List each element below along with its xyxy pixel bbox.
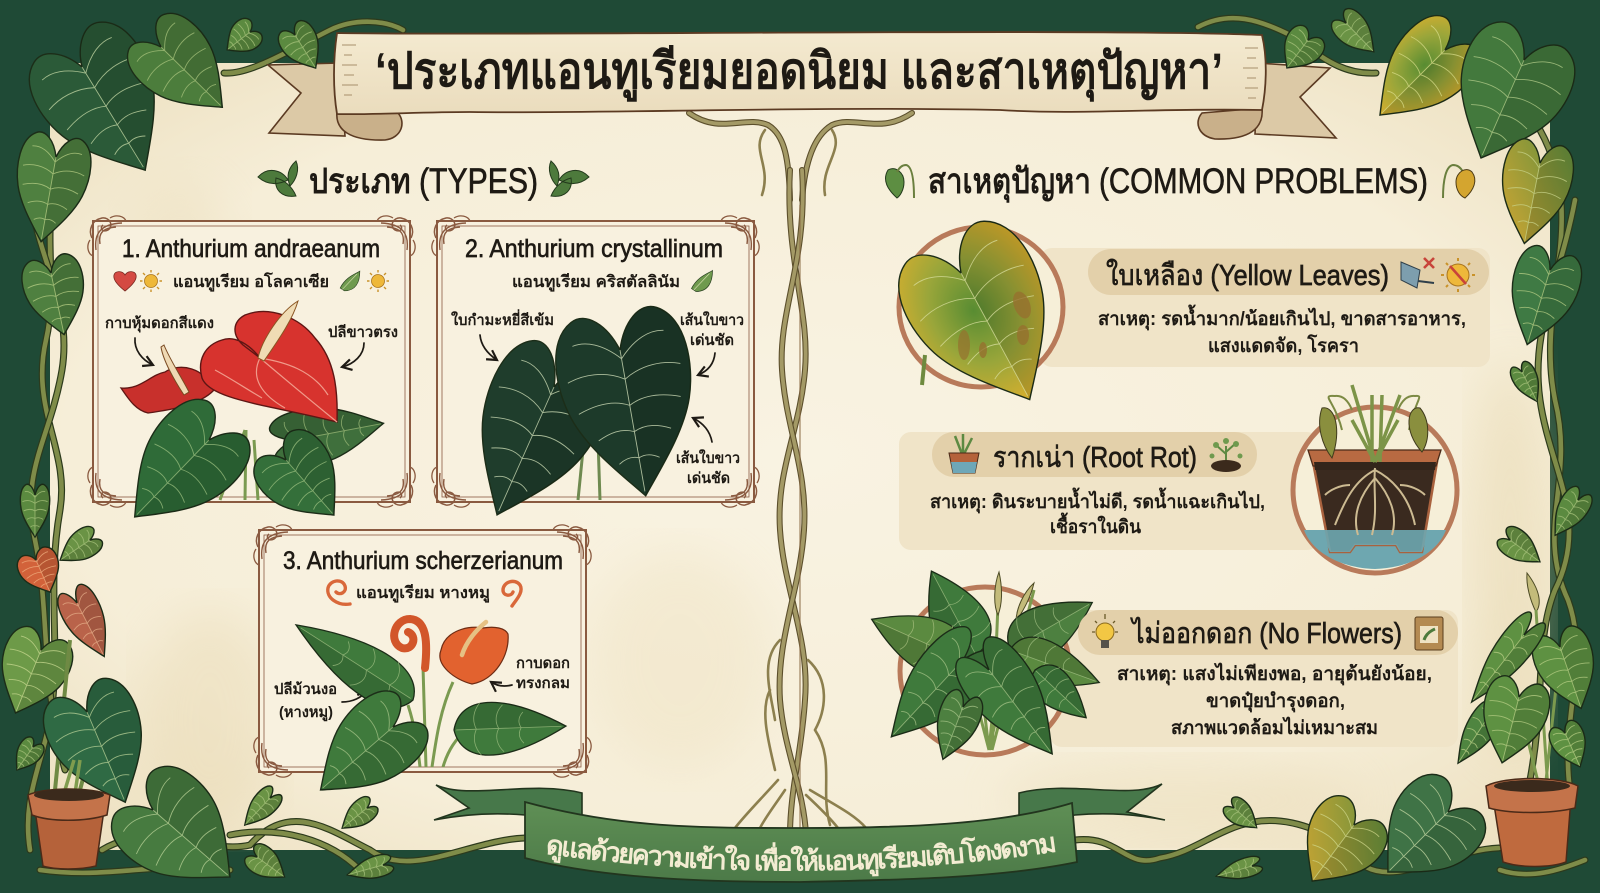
card 3 title: 3. Anthurium scherzerianum: [283, 547, 563, 575]
icon: waterlogged pot: [949, 434, 979, 473]
card 1 title: 1. Anthurium andraeanum: [122, 235, 380, 263]
icon: fertilizer bag: [1415, 617, 1443, 650]
label: prominent upper: เด่นชัด: [690, 332, 734, 349]
icon: seedling in dish: [1210, 438, 1242, 472]
banner left roll: [337, 112, 402, 140]
heading pill 2: [932, 432, 1257, 477]
label: curled spadix: ปลีม้วนงอ: [274, 681, 337, 698]
arrow: velvet leaf: [480, 335, 497, 360]
bottom vines: [40, 821, 1585, 874]
info strip 1: [1040, 248, 1490, 367]
card frame 2: [432, 216, 759, 507]
card 3 spiral icons: [328, 581, 521, 606]
arrow: round spathe: [491, 682, 512, 686]
icon: leaf sprig right: [549, 161, 589, 196]
description 2 line 1: สาเหตุ: ดินระบายน้ำไม่ดี, รดน้ำแฉะเกินไป,: [930, 487, 1265, 514]
illustration: orange anthurium: [283, 604, 567, 820]
arrow: spadix: [342, 343, 364, 367]
panel: yellow leaves: [883, 208, 1490, 432]
panel: type 3 Anthurium scherzerianum: [254, 525, 591, 820]
banner left tail: [268, 63, 345, 136]
corner foliage top-left: [5, 4, 331, 341]
ribbon right tail: [1019, 784, 1165, 825]
icon: yellow drooping leaf right: [1443, 165, 1475, 198]
heading pill 1: [1088, 249, 1489, 295]
terracotta pot right: [1493, 798, 1571, 866]
label: prominent lower: เด่นชัด: [687, 470, 730, 487]
title banner: [268, 32, 1336, 140]
heading text: types: ประเภท (TYPES): [309, 162, 538, 201]
panel: root rot: [899, 385, 1457, 573]
ribbon body: [525, 802, 1077, 882]
label: spathe shape: กาบดอก: [516, 655, 570, 672]
banner right roll: [1198, 108, 1262, 139]
card 2 subtitle: แอนทูเรียม คริสตัลลินัม: [512, 272, 680, 293]
panel: type 1 Anthurium andraeanum: [88, 216, 415, 550]
arrow: upper veins: [698, 353, 715, 375]
icon: drooping leaf left: [886, 165, 914, 198]
illustration: red anthurium: [101, 301, 389, 550]
panel: type 2 Anthurium crystallinum: [432, 216, 759, 539]
illustration: pot with rotten roots: [1304, 385, 1446, 569]
heading text: problems: สาเหตุปัญหา (COMMON PROBLEMS): [928, 162, 1428, 203]
description 3 line 2: ขาดปุ๋ยบำรุงดอก,: [1206, 691, 1345, 713]
label: white veins upper: เส้นใบขาว: [680, 311, 744, 329]
description 1 line 2: แสงแดดจัด, โรครา: [1208, 334, 1359, 357]
left border vines: [28, 130, 78, 850]
info strip 2: [899, 432, 1319, 550]
icon: sun crossed: [1441, 258, 1475, 292]
frame ring 3: [900, 587, 1070, 755]
main title: ‘ประเภทแอนทูเรียมยอดนิยม และสาเหตุปัญหา’: [375, 43, 1223, 102]
heading: root rot: รากเน่า (Root Rot): [993, 442, 1197, 474]
footer ribbon: [434, 783, 1166, 883]
icon: leaf sprig left: [258, 161, 298, 196]
card 3 subtitle: แอนทูเรียม หางหมู: [356, 583, 490, 604]
description 2 line 2: เชื้อราในดิน: [1050, 512, 1141, 538]
section heading: types: [258, 161, 589, 201]
illustration: plant without flowers: [861, 558, 1107, 774]
illustration: yellowing leaf: [883, 208, 1090, 432]
card 1 icons: [114, 270, 389, 292]
icon: light bulb: [1092, 614, 1118, 648]
label: pig tail: (หางหมู): [279, 704, 333, 722]
bottom-right potted plant and foliage: [1214, 573, 1600, 893]
arrow: curled spadix: [342, 690, 367, 702]
right border vines: [1530, 130, 1576, 790]
card 2 title: 2. Anthurium crystallinum: [465, 235, 723, 263]
central vine spine: [689, 113, 912, 835]
banner right tail: [1255, 63, 1336, 138]
description 3 line 1: สาเหตุ: แสงไม่เพียงพอ, อายุต้นยังน้อย,: [1117, 662, 1432, 686]
label: spathe round: ทรงกลม: [516, 675, 570, 692]
arrow: spathe: [135, 338, 153, 365]
card 1 subtitle: แอนทูเรียม อโลคาเซีย: [173, 271, 329, 293]
label: velvet leaf: ใบกำมะหยี่สีเข้ม: [451, 309, 554, 329]
section heading: common problems: [886, 162, 1475, 203]
frame ring 1: [899, 227, 1063, 387]
card frame 3: [254, 525, 591, 777]
corner foliage top-right: [1271, 4, 1596, 574]
banner body: [334, 32, 1266, 114]
panel: no flowers: [861, 558, 1458, 774]
label: white spadix: ปลีขาวตรง: [328, 324, 398, 341]
heading pill 3: [1078, 610, 1458, 655]
info strip 3: [1050, 610, 1458, 747]
card 2 icon: [692, 270, 712, 292]
ribbon slogan: ดูแลด้วยความเข้าใจ เพื่อให้แอนทูเรียมเติบโตงดงาม: [548, 836, 1056, 876]
frame ring 2: [1293, 407, 1457, 573]
label: red spathe: กาบหุ้มดอกสีแดง: [105, 315, 214, 333]
heading: no flowers: ไม่ออกดอก (No Flowers): [1130, 616, 1402, 650]
label: white veins lower: เส้นใบขาว: [676, 449, 740, 467]
top vines: [224, 18, 1376, 73]
bottom-left potted plant and foliage: [0, 484, 395, 893]
ribbon left tail: [434, 785, 582, 825]
heading: yellow leaves: ใบเหลือง (Yellow Leaves): [1106, 258, 1389, 292]
icon: watering can: [1401, 258, 1434, 288]
description 1 line 1: สาเหตุ: รดน้ำมาก/น้อยเกินไป, ขาดสารอาหาร,: [1098, 304, 1466, 331]
description 3 line 3: สภาพแวดล้อมไม่เหมาะสม: [1171, 716, 1378, 739]
terracotta pot left: [35, 810, 104, 869]
card frame 1: [88, 216, 415, 507]
illustration: dark velvet leaves: [443, 301, 711, 539]
arrow: lower veins: [693, 418, 712, 442]
